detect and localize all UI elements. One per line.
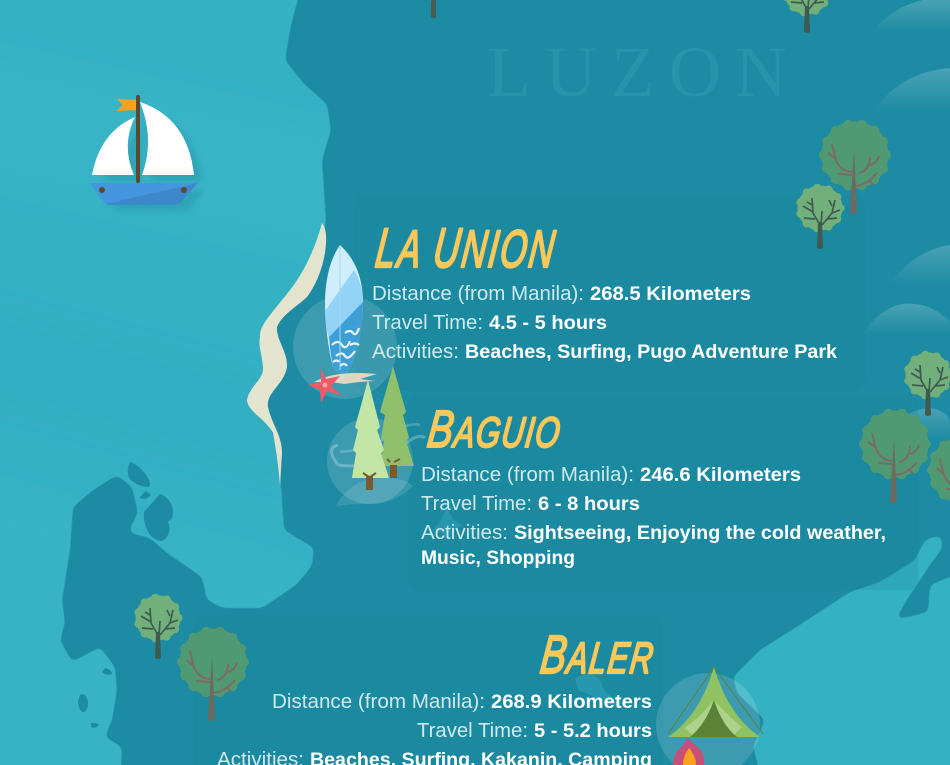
details: Baguio: Sightseeing, Enjoying the cold weather, bbox=[514, 522, 886, 544]
icon: sailboat bbox=[90, 95, 204, 211]
details: Baguio bbox=[421, 464, 886, 569]
details: Baler bbox=[217, 691, 652, 765]
trees: northern group bbox=[431, 0, 888, 249]
details: La Union: Distance (from Manila): bbox=[372, 283, 584, 305]
text: La Union bbox=[372, 217, 837, 363]
trees: western group bbox=[136, 596, 246, 721]
details: La Union: Travel Time: bbox=[372, 312, 483, 334]
beach strip bbox=[247, 223, 326, 485]
details: La Union: Activities: bbox=[372, 341, 459, 363]
icon: surfboard bbox=[325, 245, 363, 373]
panel: Baguio bbox=[408, 395, 918, 590]
text: Baguio bbox=[421, 399, 886, 569]
details: La Union: 4.5 - 5 hours bbox=[489, 312, 607, 334]
details: Baler: 5 - 5.2 hours bbox=[534, 720, 652, 742]
details: La Union: 268.5 Kilometers bbox=[590, 283, 751, 305]
icon: surfboard bubble bbox=[293, 295, 397, 399]
heading: La Union: LA UNION bbox=[372, 217, 559, 280]
icon: dark pine tree bbox=[380, 366, 414, 477]
icon: sand swoosh bbox=[314, 373, 377, 384]
details: Baguio: Activities: bbox=[421, 522, 508, 544]
details: Baguio: 6 - 8 hours bbox=[538, 493, 640, 515]
details: La Union: Beaches, Surfing, Pugo Adventure Park bbox=[465, 341, 837, 363]
panel: Baler bbox=[193, 615, 663, 765]
details: La Union bbox=[372, 283, 837, 363]
details: Baler: 268.9 Kilometers bbox=[491, 691, 652, 713]
details: Baguio: Distance (from Manila): bbox=[421, 464, 634, 486]
text: Baler bbox=[217, 625, 657, 765]
details: Baguio: 246.6 Kilometers bbox=[640, 464, 801, 486]
details: Baguio: Music, Shopping bbox=[421, 547, 575, 569]
details: Baler: Travel Time: bbox=[417, 720, 528, 742]
label: LUZON: LUZON bbox=[487, 32, 787, 112]
panel: La Union bbox=[355, 195, 865, 390]
details: Baler: Distance (from Manila): bbox=[272, 691, 485, 713]
icon: pine tree bubble bbox=[327, 418, 425, 506]
inland lakes bbox=[432, 508, 622, 708]
heading: Baler: BALER bbox=[538, 625, 657, 685]
details: Baguio: Travel Time: bbox=[421, 493, 532, 515]
small islands bbox=[78, 462, 173, 728]
icon: tent bbox=[656, 667, 763, 765]
icon: light pine tree bbox=[352, 380, 389, 489]
trees: eastern group bbox=[862, 352, 950, 529]
icon: campfire bbox=[673, 738, 704, 765]
heading: Baguio: BAGUIO bbox=[425, 399, 564, 458]
icon: starfish bbox=[308, 368, 342, 403]
mountain mounds bbox=[862, 0, 950, 440]
